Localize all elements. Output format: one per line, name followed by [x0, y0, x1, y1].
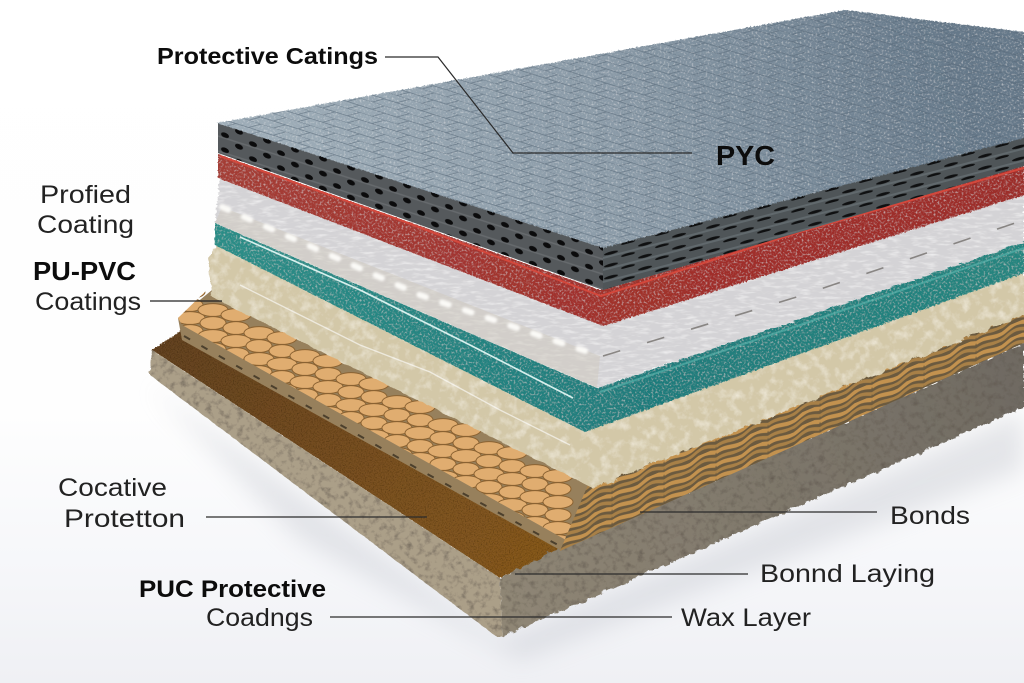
- layered material stack: [150, 10, 1024, 637]
- layer: teal coated: [215, 223, 1024, 432]
- label: Cocative Protetton: Protetton: [64, 505, 185, 533]
- floor shadow: [150, 385, 1024, 660]
- label: Wax Layer: Wax Layer: [681, 604, 811, 632]
- label: Protective Catings: [157, 43, 692, 153]
- layer: cream fleece: [208, 235, 1024, 488]
- label: PU-PVC Coatings: [33, 256, 222, 316]
- label: Protective Catings: Protective Catings: [157, 43, 378, 69]
- layer: base slab: [150, 330, 1024, 637]
- layer: dark mesh: [218, 123, 1024, 290]
- label: PU-PVC Coatings: Coatings: [35, 288, 141, 316]
- label: Cocative Protetton: [58, 474, 427, 533]
- label: Profied Coating: Coating: [37, 211, 134, 239]
- label: Profied Coating: Profied: [40, 181, 131, 209]
- label: PYC: PYC: [716, 140, 775, 171]
- label: Profied Coating: [37, 181, 134, 239]
- label: PU-PVC Coatings: PU-PVC: [33, 256, 136, 286]
- layer: white fibre: [215, 178, 1024, 388]
- label: Bonnd Laying: Bonnd Laying: [760, 560, 935, 588]
- label: Cocative Protetton: Cocative: [58, 474, 167, 502]
- label: Bonds: Bonds: [890, 502, 970, 530]
- label: PUC Protective Coadngs: [139, 576, 672, 632]
- layer: red coated: [218, 154, 1024, 326]
- layer: woven straw: [175, 286, 1024, 551]
- layer: grey textured top: [217, 10, 1024, 248]
- label: PUC Protective Coadngs: PUC Protective: [139, 576, 326, 603]
- label: PUC Protective Coadngs: Coadngs: [206, 604, 313, 632]
